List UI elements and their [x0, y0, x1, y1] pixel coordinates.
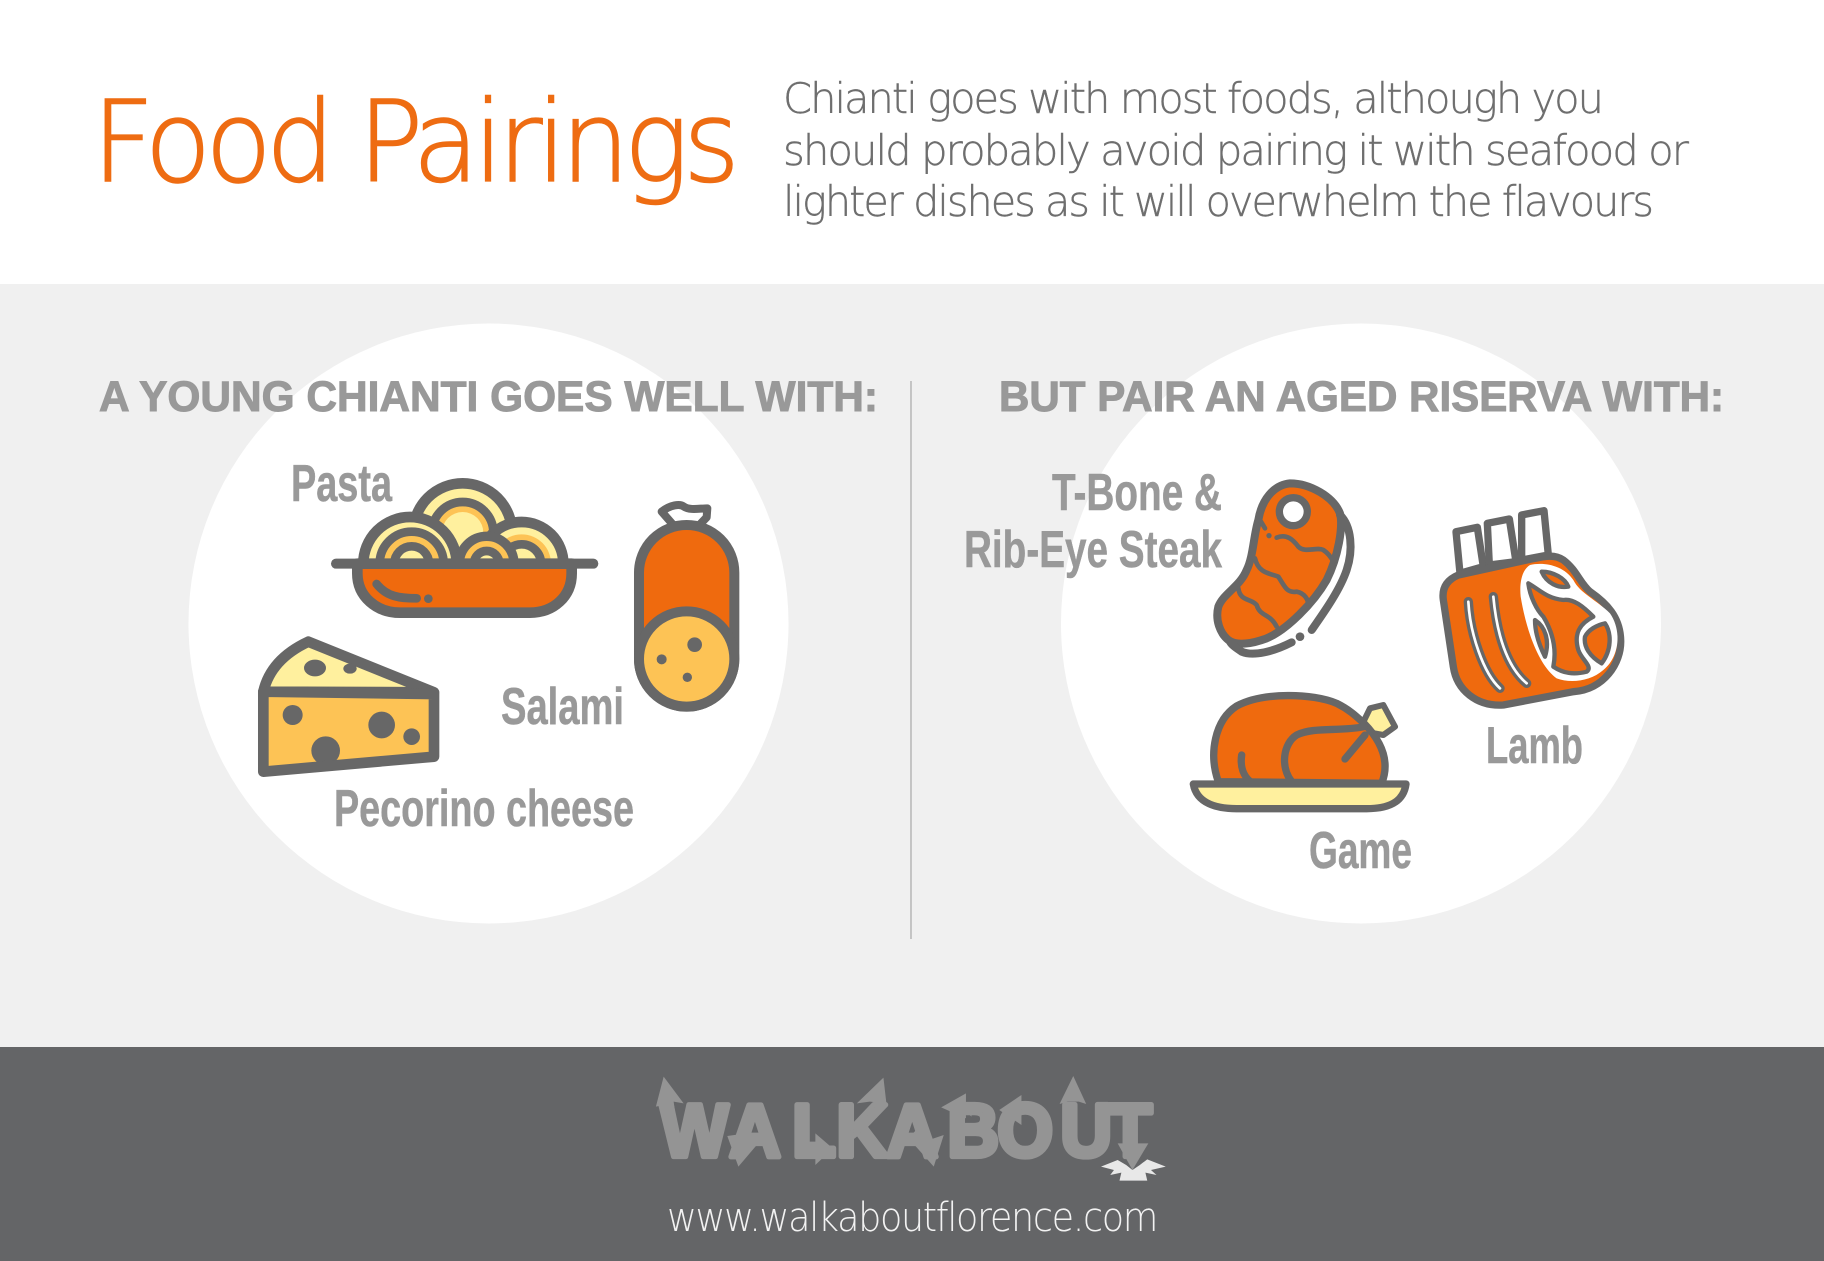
main panel background: [0, 284, 1824, 1047]
label: pecorino cheese: Pecorino cheese: [334, 780, 634, 838]
panel: aged riserva circle: [1061, 324, 1661, 924]
heading: young chianti: A YOUNG CHIANTI GOES WELL WITH:: [99, 373, 878, 421]
title: Food Pairings: [92, 78, 734, 208]
website url: www.walkaboutflorence.com: [667, 1195, 1157, 1241]
label: pasta: Pasta: [291, 455, 393, 513]
label: t-bone and rib-eye steak: T-Bone &: [1052, 464, 1222, 522]
icon: pecorino cheese: [263, 642, 434, 772]
intro text block: should probably avoid pairing it with seafood or: [783, 126, 1690, 175]
icon: steak: [1217, 483, 1351, 654]
label: lamb: Lamb: [1486, 717, 1583, 775]
intro text block: [783, 74, 1690, 226]
logo: walkabout: WALKABOUT: [661, 1089, 1152, 1173]
footer band: [0, 1047, 1824, 1261]
intro text block: lighter dishes as it will overwhelm the flavours: [783, 177, 1652, 226]
label: game: Game: [1309, 822, 1412, 880]
intro text block: Chianti goes with most foods, although you: [783, 74, 1602, 123]
icon: lamb rack: [1443, 511, 1621, 705]
label: t-bone and rib-eye steak: [964, 464, 1222, 579]
panel: young chianti circle: [188, 324, 788, 924]
heading: aged riserva: BUT PAIR AN AGED RISERVA WITH:: [999, 373, 1724, 421]
icon: pasta: [336, 483, 593, 613]
label: salami: Salami: [501, 678, 624, 736]
icon: roast game bird: [1193, 696, 1406, 809]
header background: [0, 0, 1824, 284]
label: t-bone and rib-eye steak: Rib-Eye Steak: [964, 521, 1222, 579]
icon: salami: [639, 505, 734, 707]
